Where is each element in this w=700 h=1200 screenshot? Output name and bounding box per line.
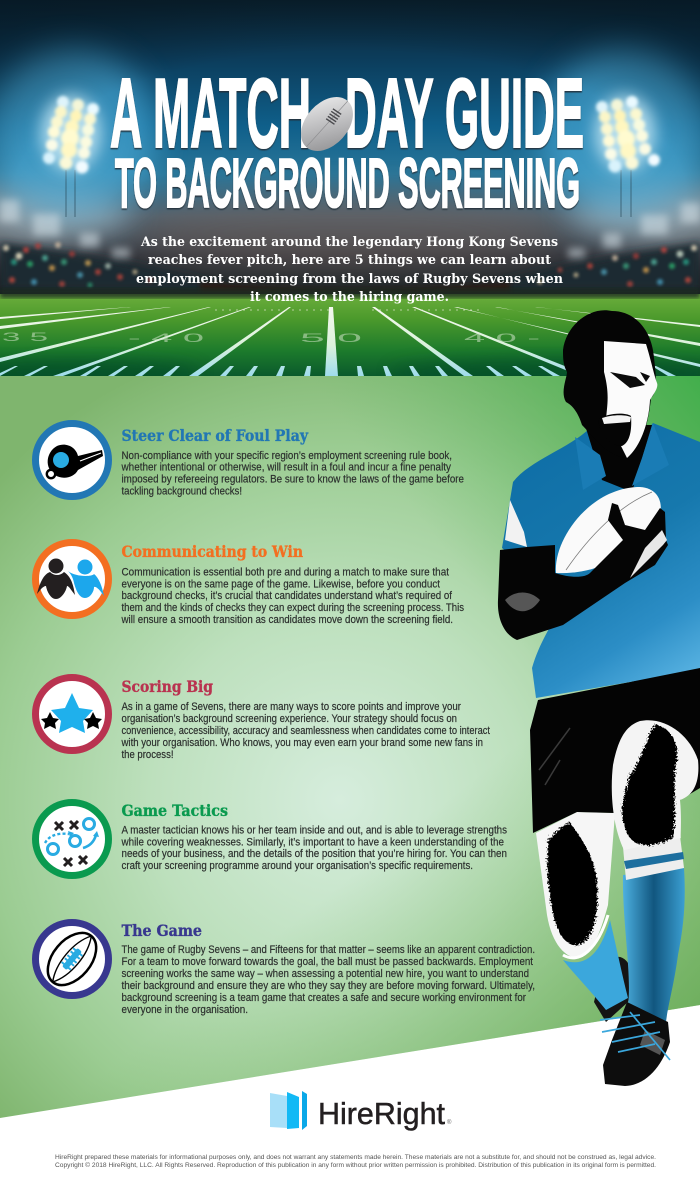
HireRight logo: HireRight (318, 1096, 445, 1131)
shorts (530, 665, 700, 833)
body text: them and the kinds of checks they can expect during the screening process. This (122, 602, 465, 614)
player head (563, 310, 657, 458)
body text: the process! (122, 749, 174, 761)
rugby ball icon (291, 87, 363, 161)
held rugby ball (556, 487, 661, 573)
body text: their background and ensure they are who they say they are before moving forward. Ultimately, (122, 980, 535, 992)
collar (575, 423, 669, 490)
heading: Communicating to Win (122, 542, 303, 561)
heading: Game Tactics (122, 801, 228, 820)
body text (121, 824, 508, 872)
body text: with your organisation. Who knows, you may even earn your brand some new fans in (121, 737, 483, 749)
icon: rugby ball outline (36, 922, 108, 996)
body text: A master tactician knows his or her team inside and out, and is able to leverage strengths (122, 824, 508, 836)
body text: craft your screening programme around your organisation’s specific requirements. (122, 860, 473, 872)
HireRight logo: ® (447, 1119, 452, 1126)
body text: tackling background checks! (122, 486, 242, 498)
yard lines (0, 307, 700, 376)
body text: As in a game of Sevens, there are many ways to score points and improve your (122, 701, 461, 713)
body text: everyone is on the same page of the game. Likewise, before you conduct (122, 578, 440, 590)
item: Game Tactics (36, 801, 508, 876)
jersey (502, 423, 700, 698)
top dashes (215, 309, 480, 311)
yard numbers: 4 0 - (464, 331, 540, 345)
item: Communicating to Win (36, 542, 465, 626)
yard numbers: - 4 0 (128, 331, 205, 345)
back boot (594, 957, 633, 1022)
green content panel (0, 376, 700, 1118)
body text: imposed by refereeing regulators. Be sure to know the laws of the game before (122, 474, 464, 486)
legal footer: HireRight prepared these materials for informational purposes only, and does not warrant any statements made herein. These materials are not a substitute for, and should not be construed as, legal advice. (55, 1154, 656, 1161)
floodlight: right (595, 95, 660, 217)
title (110, 58, 584, 222)
yard numbers: 5 0 (300, 331, 363, 345)
trailing sock (563, 920, 628, 1010)
heading: Scoring Big (122, 677, 213, 696)
body text: convenience, accessibility, accuracy and seamlessness when candidates come to interact (122, 725, 490, 737)
rugby player figure (498, 310, 700, 1086)
football field (0, 288, 700, 386)
intro text: As the excitement around the legendary Hong Kong Sevens (140, 235, 558, 250)
trailing leg (536, 812, 615, 958)
secondary stand lights (0, 200, 700, 258)
item: Scoring Big (36, 677, 490, 761)
body text: background checks, it’s crucial that candidates understand what’s required of (122, 590, 453, 602)
hash ticks (0, 366, 311, 376)
body text (122, 944, 535, 1016)
icon: stars (36, 678, 108, 750)
body text (121, 566, 465, 626)
body text: will ensure a smooth transition as candidates move down the screening field. (121, 614, 453, 626)
legal footer (55, 1154, 656, 1169)
body text: whether intentional or otherwise, will result in a foul and incur a fine penalty (121, 462, 452, 474)
body text (121, 450, 464, 498)
front sock (623, 868, 685, 1022)
front boot (603, 1002, 670, 1086)
floodlight: left (41, 95, 101, 217)
legal footer: Copyright © 2018 HireRight, LLC. All Rights Reserved. Reproduction of this publication in any form without prior written permission is prohibited. Distribution of this publication in its original form is permitted. (55, 1161, 656, 1169)
neck shadow (585, 425, 652, 492)
front thigh and knee (612, 720, 698, 850)
body text (121, 701, 490, 761)
body text: screening works the same way – when assessing a potential new hire, you want to understand (122, 968, 529, 980)
icon: two people (36, 542, 108, 616)
yard numbers (2, 330, 540, 345)
intro text: it comes to the hiring game. (250, 290, 449, 305)
body text: For a team to move forward towards the goal, the ball must be passed backwards. Employment (122, 956, 533, 968)
title line one: A MATCH (110, 58, 311, 168)
heading: Steer Clear of Foul Play (122, 426, 309, 445)
body text: background screening is a team game that creates a safe and secure working environment for (122, 992, 526, 1004)
body text: The game of Rugby Sevens – and Fifteens for that matter – seems like an apparent contradiction. (122, 944, 535, 956)
icon: tactics board (36, 802, 108, 876)
heading: The Game (122, 921, 202, 940)
arm and hand (498, 503, 668, 640)
body text: everyone in the organisation. (122, 1004, 248, 1016)
yard numbers: 3 5 (2, 330, 49, 344)
body text: Communication is essential both pre and during a match to make sure that (122, 566, 449, 578)
item: Steer Clear of Foul Play (36, 424, 464, 498)
HireRight logo (270, 1091, 452, 1131)
intro text: employment screening from the laws of Rugby Sevens when (136, 272, 563, 287)
intro text (136, 235, 563, 305)
stadium background (0, 0, 700, 300)
body text: needs of your business, and the details of the position that you’re hiring for. You can then (122, 848, 507, 860)
icon: whistle (36, 424, 108, 496)
body text: Non-compliance with your specific region’s employment screening rule book, (122, 450, 452, 462)
body text: while covering weaknesses. Similarly, it’s important to have a keen understanding of the (121, 836, 504, 848)
item: The Game (36, 921, 535, 1016)
intro text: reaches fever pitch, here are 5 things we can learn about (148, 253, 552, 268)
body text: organisation’s background screening experience. Your strategy should focus on (122, 713, 457, 725)
crowd bokeh (0, 242, 700, 296)
